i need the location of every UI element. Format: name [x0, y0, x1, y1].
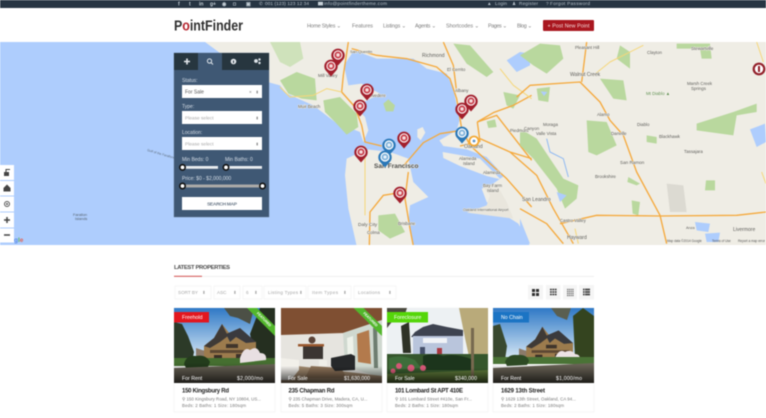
field: status: Status: [182, 78, 198, 84]
navigation: Home Styles ⌄ [307, 24, 341, 30]
price bar: $1,000/mo [556, 376, 582, 382]
card text [395, 388, 472, 408]
map labels: Daly City [358, 222, 378, 228]
card: 101 Lombard St APT 410E [387, 308, 488, 412]
slider: min beds [180, 157, 218, 170]
map labels: Albany [455, 88, 469, 93]
filters: ⬍ [388, 290, 392, 295]
navigation: Listings ⌄ [383, 24, 406, 30]
price bar: For Sale [288, 376, 308, 382]
card text: ⚲ 150 Kingsbury Road, NY 10804, US... [182, 396, 261, 402]
marker: blue [455, 127, 469, 144]
price bar: For Rent [182, 376, 203, 382]
contact details: 001 (123) 123 12 34 [265, 1, 309, 6]
map labels: Oakland International Airport [463, 208, 509, 212]
photo: house [492, 307, 595, 384]
account links: ♟ [512, 1, 516, 6]
navigation: Shortcodes ⌄ [446, 24, 479, 30]
parks [270, 42, 520, 239]
filters: Item Types [312, 290, 339, 295]
social icons: f [178, 2, 180, 8]
price bar: $340,000 [455, 376, 477, 382]
map labels: Piedmont [510, 128, 529, 133]
map attribution [667, 239, 766, 243]
roads [280, 42, 532, 246]
price bar [182, 376, 263, 382]
navigation [307, 24, 532, 30]
logo: PointFinder [174, 18, 243, 34]
price bar: For Sale [395, 376, 415, 382]
slider: min baths [223, 157, 262, 170]
card: 235 Chapman Rd [281, 308, 382, 412]
card text [288, 388, 368, 408]
marker: red [393, 187, 407, 204]
slider: price: Price: $0 - $2,000,000 [182, 176, 231, 182]
post button [543, 20, 594, 31]
contact details [259, 1, 387, 6]
map labels: Livermore [733, 227, 755, 233]
field: location [182, 130, 262, 150]
field: status: × [249, 89, 252, 94]
social icons: ◘ [233, 2, 236, 8]
field: type: ⬍ [256, 115, 259, 120]
card text: 101 Lombard St APT 410E [395, 388, 463, 394]
map labels: Bay Farm [483, 183, 502, 188]
marker: blue [378, 151, 392, 168]
card: 150 Kingsbury Rd [174, 308, 275, 412]
marker: red [360, 84, 374, 100]
navigation: Features [352, 24, 373, 30]
social icons [178, 2, 251, 8]
control: home [0, 181, 14, 196]
field: type: Please select [185, 115, 214, 121]
marker: red [353, 100, 367, 116]
search panel [174, 53, 269, 217]
map labels: Walnut Creek [570, 72, 601, 78]
map labels: San Leandro [522, 197, 551, 203]
map labels: Alamo [597, 112, 610, 117]
social icons: ▣ [246, 2, 251, 8]
card text: ⚲ 1629 13th Street, Oakland, CA 94... [501, 396, 576, 402]
card text: 1629 13th Street [501, 388, 545, 394]
view toggles [528, 285, 594, 300]
map labels: Alameda [483, 170, 501, 175]
post button: + Post New Point [548, 24, 590, 30]
control: zoom out [0, 228, 14, 242]
map labels: Hayward [567, 235, 587, 241]
map labels: San Quentin [350, 49, 372, 54]
section heading: LATEST PROPERTIES [174, 265, 230, 271]
top bar [0, 0, 766, 8]
land: bay farm [467, 185, 513, 219]
social icons: t [189, 2, 191, 8]
badge: foreclosure: Foreclosure [394, 315, 422, 321]
land: san francisco peninsula [345, 149, 428, 246]
map labels: Tassajara [684, 149, 703, 154]
marker: red [397, 132, 411, 148]
field: status: ⬍ [256, 89, 259, 94]
field: type [182, 104, 262, 124]
map labels: Alameda [459, 156, 477, 161]
photo: house [173, 307, 276, 384]
map labels: Moraga [543, 122, 558, 127]
ribbon: featured: FEATURED [256, 311, 272, 328]
filters: ⬍ [299, 290, 303, 295]
marker: red [354, 146, 368, 162]
badge: no chain: No Chain [501, 315, 523, 321]
filters: 6 [246, 290, 249, 295]
price bar: $2,000/mo [237, 376, 263, 382]
land: islands [383, 99, 395, 111]
map attribution: Map data ©2014 Google [667, 239, 702, 243]
map labels: Islands [75, 216, 87, 221]
map attribution: Report a map error [738, 239, 766, 243]
card text: 150 Kingsbury Rd [182, 388, 229, 394]
filters: ⬍ [254, 290, 258, 295]
price bar: For Rent [501, 376, 522, 382]
filters: ⬍ [343, 290, 347, 295]
map labels: Mill Valley [318, 73, 338, 78]
east inlet water [507, 52, 530, 72]
reservoirs [520, 63, 766, 244]
map labels: Springs [691, 86, 707, 91]
map labels: Valle Vista [536, 131, 557, 136]
land: marin and east bay [205, 42, 766, 246]
map labels: Brookshire [595, 174, 617, 179]
slider: price [180, 176, 265, 189]
field: type: Type: [182, 104, 194, 110]
control: locate [0, 196, 14, 212]
field: status: For Sale [185, 89, 204, 95]
field: status [182, 78, 262, 98]
card: 1629 13th Street [493, 308, 594, 412]
search button [182, 197, 262, 210]
map labels: Island [463, 161, 475, 166]
map labels: Belvedere [366, 93, 386, 98]
map labels: Blackhawk [659, 134, 681, 139]
parks: east [520, 44, 757, 215]
map labels: Mt Diablo ▲ [646, 91, 670, 96]
search button: SEARCH MAP [207, 201, 238, 207]
map labels: Brisbane [398, 221, 416, 226]
map labels: Pleasant Hill [575, 45, 599, 50]
photo: white house [386, 307, 489, 384]
account links: ▲ [487, 1, 492, 6]
account links: Login [495, 1, 507, 6]
land: alameda [443, 152, 501, 179]
map labels: San Ramon [620, 160, 645, 165]
control: lock [0, 165, 14, 180]
control: zoom in [0, 212, 14, 228]
map labels: San Francisco [374, 163, 418, 170]
social icons: in [199, 2, 203, 8]
price bar [395, 376, 477, 382]
marker: red [324, 60, 338, 76]
card text: 235 Chapman Rd [288, 388, 335, 394]
field: location: Location: [182, 130, 202, 136]
map labels: Danville [611, 131, 627, 136]
map labels: Farallon [73, 212, 87, 217]
map labels: Canyon [524, 126, 540, 131]
price bar [288, 376, 370, 382]
map markers [324, 49, 765, 203]
map labels: Stewartville [691, 46, 714, 51]
filters: ⬍ [202, 290, 206, 295]
account links: Forgot Password [550, 1, 590, 6]
streams [547, 139, 568, 177]
card text [501, 388, 576, 408]
contact details: ✆ [259, 1, 263, 6]
urban area [667, 184, 687, 212]
field: location: ⬍ [256, 141, 259, 146]
badge: freehold: Freehold [182, 315, 203, 321]
filters: SORT BY [178, 290, 198, 295]
card text: Beds: 2 Baths: 1 Size: 180sqm [182, 403, 246, 408]
account links [487, 1, 590, 6]
map labels: Oakland [464, 144, 483, 150]
map labels: Castro Valley [560, 218, 587, 223]
card text: Beds: 2 Baths: 1 Size: 180sqm [395, 403, 458, 408]
account links: Register [519, 1, 538, 6]
navigation: Agents ⌄ [415, 24, 436, 30]
filters: Listing Types [268, 290, 299, 295]
card text [182, 388, 261, 408]
card text: Beds: 5 Baths: 3 Size: 300sqm [288, 403, 353, 408]
map labels [73, 45, 755, 241]
map labels: Colma [367, 230, 380, 235]
marker: red [464, 95, 478, 112]
filters: ⬍ [233, 290, 237, 295]
filters: ASC [217, 290, 227, 295]
social icons: ◉ [222, 2, 227, 8]
map attribution: Terms of Use [712, 239, 731, 243]
ribbon: featured: FEATURED [362, 311, 379, 328]
card text: ⚲ 235 Chapman Drive, Madera, CA, U... [288, 396, 368, 402]
map labels: Gulf of the Farallones [147, 148, 178, 160]
filters [175, 286, 396, 299]
marker: red [455, 103, 469, 120]
tabs [174, 53, 269, 70]
map labels: Richmond [422, 53, 445, 59]
map labels: Muir Beach [298, 104, 321, 109]
roads: east [510, 42, 766, 244]
contact details: info@pointfindertheme.com [324, 1, 387, 6]
marker: red [331, 49, 345, 66]
map labels: Diablo [637, 122, 650, 127]
map labels: Marsh Creek [687, 81, 713, 86]
slider: min baths: Min Baths: 0 [225, 157, 253, 163]
map labels: Clayton [647, 50, 662, 55]
price bar [501, 376, 582, 382]
filters: Locations [358, 290, 381, 295]
photo: interior [280, 307, 383, 384]
map labels: El Cerrito [447, 67, 466, 72]
map [0, 42, 766, 246]
map labels: Anza [686, 226, 696, 230]
google logo: gle [14, 237, 24, 244]
marker: orange [469, 136, 479, 146]
social icons: g+ [210, 2, 216, 8]
field: location: Please select [185, 141, 214, 147]
slider: min beds: Min Beds: 0 [182, 157, 209, 163]
navigation: Pages ⌄ [488, 24, 507, 30]
map labels: Island [487, 188, 499, 193]
navigation: Blog ⌄ [517, 24, 532, 30]
marker: edge [753, 63, 765, 75]
price bar: $1,630,000 [344, 376, 370, 382]
marker: blue [382, 139, 396, 156]
card text: Beds: 2 Baths: 1 Size: 180sqm [501, 403, 564, 408]
map controls [0, 165, 14, 242]
card text: ⚲ 101 Lombard Street #410e, San Fr... [395, 396, 472, 402]
account links: ? [546, 1, 549, 6]
